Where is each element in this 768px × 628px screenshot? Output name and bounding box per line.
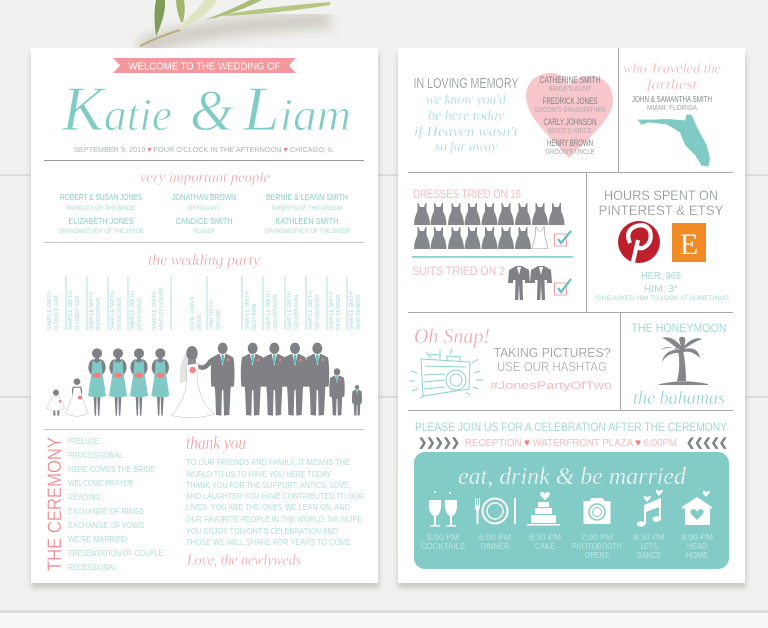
bride <box>172 346 215 418</box>
panel: dresses and suits: DRESSES TRIED ON 16 <box>413 189 521 201</box>
flower girl small <box>46 390 65 416</box>
icon: etsy: E <box>680 228 698 261</box>
panel: in loving memory: so far away <box>435 139 497 155</box>
ceremony order list: EXCHANGE OF VOWS <box>68 520 144 530</box>
wedding party names (vertical): SAMPLE SMITH <box>152 291 158 330</box>
vip list: BERNIE & LEANN SMITH <box>266 193 348 202</box>
wedding party names (vertical): SAMPLE SMITH <box>110 291 116 330</box>
icon: wedding cake <box>527 492 560 526</box>
panel: in loving memory: be here today <box>428 108 504 124</box>
wedding party names (vertical): SAMPLE SMITH <box>130 291 136 330</box>
wedding party names (vertical): BRIDESMAID <box>96 297 102 330</box>
heart with memorial names: BRIDE'S AUNT <box>548 84 592 93</box>
panel: who traveled the farthest: who Traveled the <box>623 61 721 77</box>
panel: in loving memory <box>414 75 519 155</box>
bridesmaid 4 <box>151 348 169 416</box>
timeline labels: CAKE <box>535 541 555 551</box>
panel: hours spent on pinterest and etsy: HOURS SPENT ON <box>604 187 718 203</box>
vip list <box>58 193 350 235</box>
groomsman 3 <box>283 343 307 416</box>
heart with memorial names: GROOM'S UNCLE <box>546 147 594 156</box>
vip list: READER <box>194 229 215 235</box>
groomsman 1 <box>241 343 265 416</box>
wedding party names (vertical): BRIDESMAID <box>137 297 143 330</box>
vip list: JONATHAN BROWN <box>172 193 236 202</box>
wedding party names (vertical): MAID OF HONOR <box>159 287 165 330</box>
vip list: GRANDMOTHER OF THE BRIDE <box>264 229 350 235</box>
panel: reception timeline <box>414 452 729 569</box>
date and location line: SEPTEMBER 9, 2019 ♥ FOUR O'CLOCK IN THE AFTERNOON ♥ CHICAGO, IL <box>74 145 334 154</box>
timeline labels: DINNER <box>480 541 510 551</box>
timeline labels: 6:00 PM <box>479 532 511 542</box>
panel: hours spent on pinterest and etsy: PINTEREST & ETSY <box>598 202 724 218</box>
wedding party names (vertical): RING BEARER <box>336 294 342 330</box>
ceremony order list: PROCESSIONAL <box>68 450 123 460</box>
thank you paragraph: THOSE WE WILL SHARE FOR YEARS TO COME <box>186 537 351 547</box>
panel: who traveled the farthest: JOHN & SAMANTHA SMITH <box>632 95 712 104</box>
wedding party names (vertical): KATIE JONES <box>190 297 196 330</box>
wedding party names (vertical): SAMPLE SMITH <box>245 291 251 330</box>
panel: oh snap hashtag: Oh Snap! <box>414 324 490 348</box>
timeline labels: HOME <box>686 550 708 560</box>
wedding party names (vertical): BRIDE <box>197 314 203 330</box>
timeline labels: DANCE <box>637 550 661 560</box>
panel: honeymoon: THE HONEYMOON <box>632 321 726 335</box>
thank you paragraph: OUR FAVORITE PEOPLE IN THE WORLD. WE HOPE <box>186 514 362 524</box>
thank you paragraph: LIVES. YOU ARE THE ONES WE LEAN ON, AND <box>186 502 350 512</box>
panel: dresses and suits <box>412 189 573 300</box>
wedding party names (vertical): LIAM SMITH <box>209 300 215 330</box>
timeline labels: 7:00 PM <box>581 532 613 542</box>
ceremony order list: RECESSIONAL <box>68 562 117 572</box>
heading: the ceremony: THE CEREMONY <box>45 437 66 571</box>
thank you paragraph <box>186 457 364 547</box>
groomsman 2 <box>262 343 286 416</box>
icon: checkbox suits <box>554 279 571 295</box>
decorative leaves <box>140 0 330 48</box>
groom <box>211 343 235 416</box>
timeline labels: 8:30 PM <box>634 532 664 542</box>
wedding party names (vertical): BRIDESMAID <box>117 297 123 330</box>
title: couple names: Katie <box>61 73 172 144</box>
panel: in loving memory: we know you'd <box>426 92 506 108</box>
wedding party names (vertical): GROOMSMAN <box>294 295 300 330</box>
thank you paragraph: YOU ENJOY TONIGHT'S CELEBRATION AND <box>186 526 338 536</box>
reception invitation: RECEPTION ♥ WATERFRONT PLAZA ♥ 6:00PM <box>465 437 677 449</box>
timeline labels: 5:00 PM <box>427 532 459 542</box>
timeline labels: LET'S <box>640 541 658 551</box>
ceremony order list <box>68 436 163 572</box>
icon: checkbox dresses <box>554 231 571 246</box>
icon: camera sketch <box>409 349 483 398</box>
title: couple names: Liam <box>242 73 351 144</box>
bridesmaid 2 <box>109 348 127 416</box>
icon: pinterest <box>618 221 660 263</box>
vip list: ELIZABETH JONES <box>68 217 134 226</box>
icon: palm tree <box>657 337 708 385</box>
thank you paragraph: THANK YOU FOR THE SUPPORT, ANTICS, LOVE, <box>186 480 351 490</box>
timeline labels: 6:30 PM <box>529 532 561 542</box>
ceremony order list: HERE COMES THE BRIDE <box>68 464 155 474</box>
right card <box>398 48 745 583</box>
panel: in loving memory: if Heaven wasn't <box>414 124 519 140</box>
thank you paragraph: WORLD TO US TO HAVE YOU HERE TODAY. <box>186 469 332 479</box>
icon: cocktails <box>429 491 457 526</box>
icon: house with heart <box>682 491 712 525</box>
heart with memorial names: HENRY BROWN <box>547 138 593 148</box>
wedding party names (vertical): GROOMSMAN <box>273 295 279 330</box>
bridesmaid 3 <box>130 348 148 416</box>
banner: welcome: WELCOME TO THE WEDDING OF <box>128 60 280 72</box>
icon: chosen dress <box>532 227 548 248</box>
vip list: CANDICE SMITH <box>176 217 233 226</box>
panel: oh snap hashtag: USE OUR HASHTAG <box>497 359 607 374</box>
wedding party names (vertical): SAMPLE SMITH <box>349 291 355 330</box>
title: couple names <box>61 73 351 144</box>
ceremony order list: EXCHANGE OF RINGS <box>68 506 144 516</box>
wedding party names (vertical): FLOWER GIRL <box>54 294 60 330</box>
reception invitation: ❯❯❯❯❯ <box>418 437 460 449</box>
vip list: GRANDMOTHER OF THE BRIDE <box>58 229 144 235</box>
vip list: ROBERT & SUSAN JONES <box>60 193 142 202</box>
wedding party names (vertical): GROOM <box>216 310 222 330</box>
panel: who traveled the farthest <box>623 61 721 167</box>
ring bearer 2 <box>352 385 362 416</box>
panel: reception timeline: eat, drink & be married <box>458 464 687 490</box>
panel: oh snap hashtag: #JonesPartyOfTwo <box>490 380 612 392</box>
timeline labels: HEAD <box>687 541 707 551</box>
left card <box>31 48 378 583</box>
vip list: PARENTS OF THE BRIDE <box>67 206 135 212</box>
ceremony order list: WE'RE MARRIED <box>68 534 127 544</box>
panel: who traveled the farthest: farthest <box>647 77 698 93</box>
panel: who traveled the farthest: MIAMI, FLORIDA <box>647 103 697 112</box>
panel: hours spent on pinterest and etsy: HIM: 3* <box>644 283 678 295</box>
heading: the wedding party: the wedding party <box>148 252 261 269</box>
icon: music notes and hearts <box>637 490 663 527</box>
heading: very important people: very important people <box>140 170 270 186</box>
ceremony order list: WELCOME PRAYER <box>68 478 133 488</box>
reception invitation: ❮❮❮❮❮ <box>686 437 728 449</box>
timeline labels: PHOTOBOOTH <box>572 541 622 551</box>
wedding party silhouettes <box>46 343 362 418</box>
wedding party names (vertical): SAMPLE SMITH <box>47 291 53 330</box>
icon: suit 1 <box>508 266 530 300</box>
vip list: OFFICIANT <box>188 206 221 212</box>
reception invitation: PLEASE JOIN US FOR A CELEBRATION AFTER THE CEREMONY <box>415 422 727 434</box>
heart with memorial names: FREDRICK JONES <box>542 96 598 106</box>
card shadows <box>31 54 746 588</box>
wedding party names (vertical): SAMPLE SMITH <box>308 291 314 330</box>
timeline labels: 9:00 PM <box>681 532 713 542</box>
icon: plate and cutlery <box>475 498 516 524</box>
panel: hours spent on pinterest and etsy: HER: 965 <box>641 270 681 282</box>
timeline labels: OPENS <box>585 550 609 560</box>
panel: honeymoon <box>632 321 726 409</box>
vip list: KATHLEEN SMITH <box>276 217 339 226</box>
wedding party names (vertical): GROOMSMAN <box>315 295 321 330</box>
ring bearer 1 <box>329 368 345 416</box>
heart with memorial names: CATHERINE SMITH <box>540 75 600 85</box>
panel: oh snap hashtag <box>409 324 612 398</box>
title: couple names: & <box>190 78 234 143</box>
heart with memorial names: CARLY JOHNSON <box>544 117 596 127</box>
timeline labels <box>421 532 713 560</box>
wedding party names (vertical): BEST MAN <box>252 303 258 330</box>
heart with memorial names <box>526 73 613 158</box>
thank you paragraph: AND LAUGHTER YOU HAVE CONTRIBUTED TO OUR <box>186 491 364 501</box>
wedding party names (vertical): SAMPLE SMITH <box>68 291 74 330</box>
thank you paragraph: TO OUR FRIENDS AND FAMILY, IT MEANS THE <box>186 457 350 467</box>
heart with memorial names: GROOM'S GRANDFATHER <box>534 105 606 114</box>
panel: dresses and suits: SUITS TRIED ON 2 <box>412 266 505 278</box>
wedding party names (vertical) <box>47 276 362 330</box>
icon: florida map <box>638 114 710 167</box>
wedding party names (vertical): SAMPLE SMITH <box>287 291 293 330</box>
heart with memorial names: BRIDE'S NIECE <box>548 126 592 135</box>
panel: hours spent on pinterest and etsy <box>595 187 729 302</box>
signature: love the newlyweds: Love, the newlyweds <box>186 552 301 569</box>
heading: thank you: thank you <box>186 433 246 454</box>
panel: hours spent on pinterest and etsy: *SHE ASKED HIM TO LOOK AT SOMETHING <box>595 295 729 302</box>
panel: honeymoon: the bahamas <box>633 388 725 409</box>
ceremony order list: PRELUDE <box>68 436 99 446</box>
panel: in loving memory: IN LOVING MEMORY <box>414 75 518 92</box>
reception invitation <box>415 422 728 449</box>
icon: suit 2 <box>530 266 552 300</box>
vip list: PARENTS OF THE GROOM <box>272 206 342 212</box>
icon: camera <box>584 498 610 524</box>
ceremony order list: PRESENTATION OF COUPLE <box>68 548 163 558</box>
panel dividers <box>408 48 733 410</box>
flower girl large <box>66 378 88 416</box>
wedding party names (vertical): RING BEARER <box>356 294 362 330</box>
ceremony order list: READING <box>68 492 101 502</box>
timeline labels: COCKTAILS <box>421 541 465 551</box>
wedding party names (vertical): SAMPLE SMITH <box>329 291 335 330</box>
bridesmaid 1 <box>88 348 106 416</box>
groomsman 4 <box>305 343 329 416</box>
wedding party names (vertical): FLOWER GIRL <box>75 294 81 330</box>
wedding party names (vertical): SAMPLE SMITH <box>89 291 95 330</box>
wedding party names (vertical): SAMPLE SMITH <box>266 291 272 330</box>
panel: oh snap hashtag: TAKING PICTURES? <box>494 345 610 360</box>
